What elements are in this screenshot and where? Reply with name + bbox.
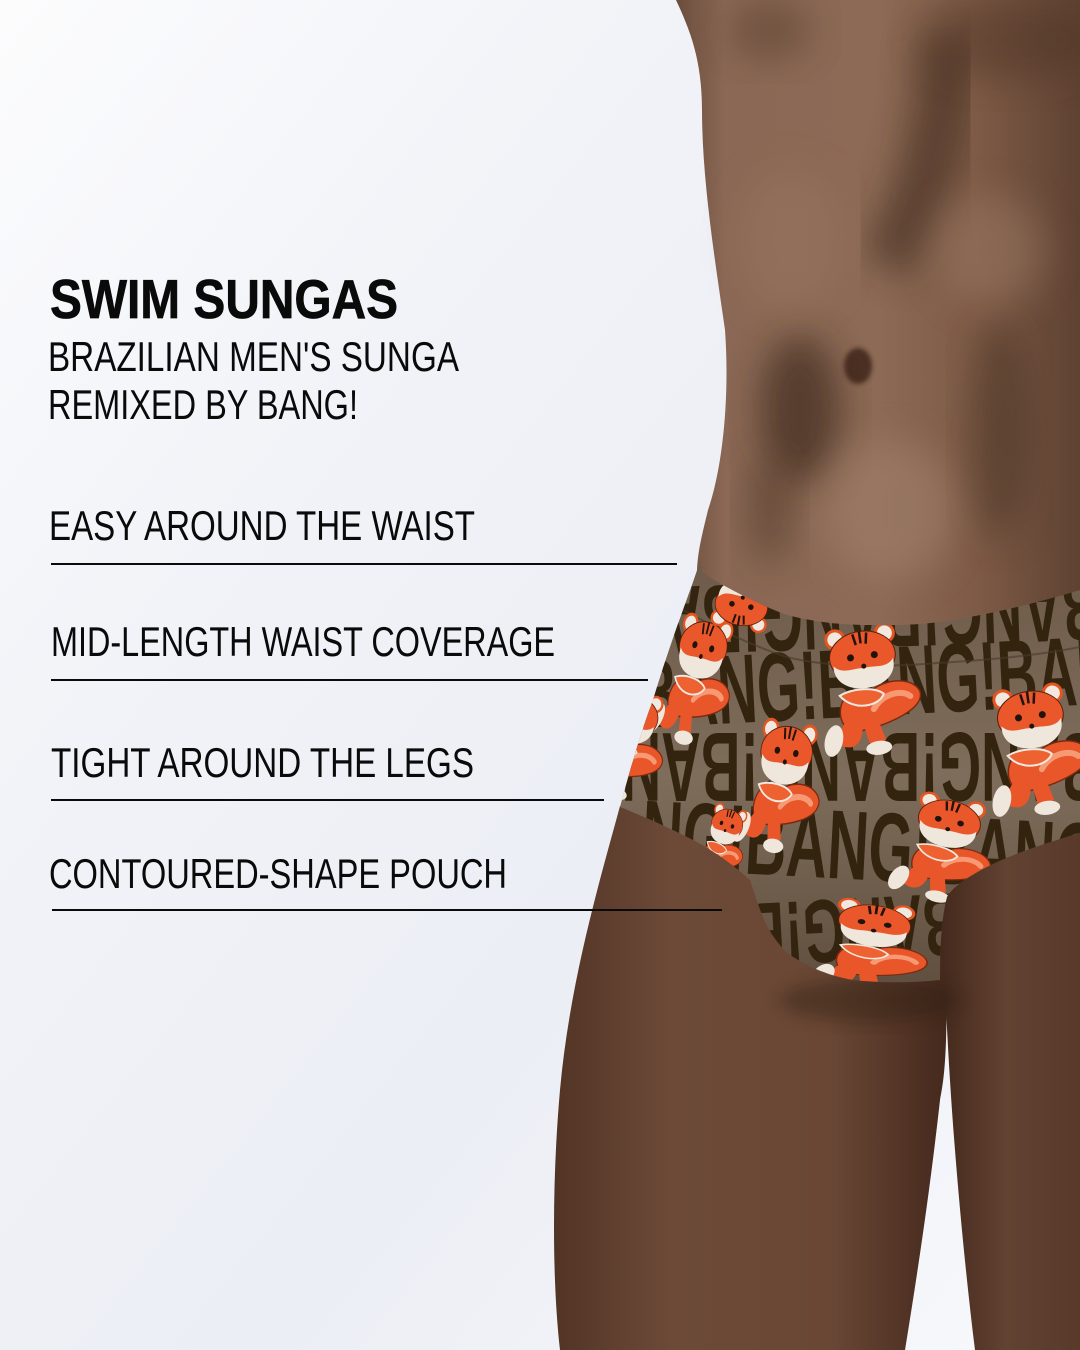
BANG! pattern rows [625,585,1080,963]
BANG! pattern rows: BANG!BANG!BANG!BANG! [381,712,1080,822]
feature: coverage: MID-LENGTH WAIST COVERAGE [51,618,555,665]
right leg [930,800,1080,1350]
leg shadow [780,978,960,1022]
tiger prints [622,585,1080,982]
left leg [554,800,947,1350]
torso [676,0,1080,680]
swim sunga garment [620,561,1080,982]
title: SWIM SUNGAS [50,268,398,330]
subtitle [48,333,459,428]
feature: waist: EASY AROUND THE WAIST [49,502,475,549]
feature: legs: TIGHT AROUND THE LEGS [51,739,474,786]
waistband seam [683,610,1080,666]
BANG! pattern rows: BANG!BANG! [606,874,964,993]
subtitle: REMIXED BY BANG! [48,381,358,428]
subtitle: BRAZILIAN MEN'S SUNGA [48,333,459,380]
navel [844,348,872,384]
model figure [554,0,1080,1350]
feature: pouch: CONTOURED-SHAPE POUCH [49,850,507,897]
